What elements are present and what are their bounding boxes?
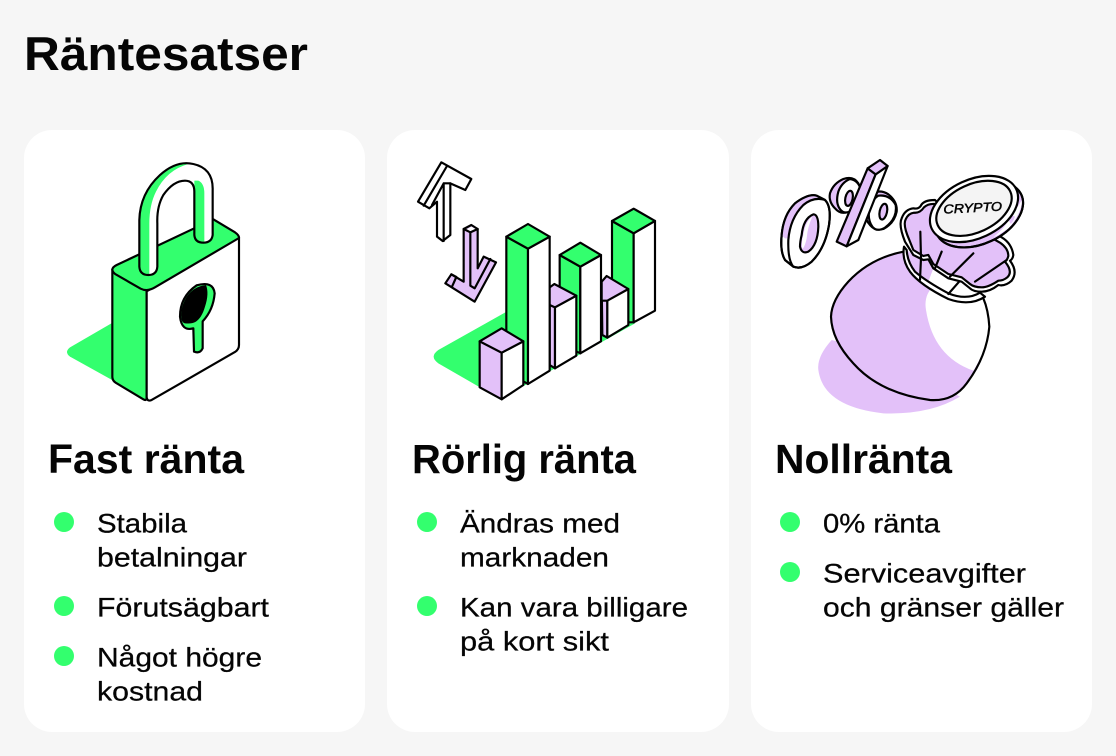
percent symbol [781, 160, 897, 268]
bullet list: rörlig ränta: på kort sikt [460, 626, 610, 656]
bullet list: rörlig ränta: Ändras med [460, 508, 620, 538]
bag lower collar [903, 247, 985, 302]
bullet list: rörlig ränta: Kan vara billigare [460, 592, 688, 622]
bullet list: rörlig ränta: marknaden [460, 542, 609, 572]
bullet list: fast ränta: Stabila [97, 508, 187, 538]
bag body [831, 252, 989, 400]
bullet list: nollränta: 0% ränta [823, 508, 940, 538]
bullet list: nollränta: och gränser gäller [823, 592, 1064, 622]
bar 1 [480, 328, 523, 399]
bullet list: fast ränta: kostnad [97, 676, 203, 706]
heading: nollränta: Nollränta [775, 436, 953, 482]
shackle [139, 163, 213, 275]
percent circle left [830, 178, 861, 213]
percent slash [837, 160, 888, 246]
bar 6 [612, 209, 655, 322]
percent circle right [866, 192, 897, 230]
icon: bar chart with arrows [418, 162, 655, 399]
bullet list: fast ränta: Något högre [97, 642, 262, 672]
coin label: CRYPTO [943, 200, 1003, 217]
heading: fast ränta: Fast ränta [48, 436, 245, 482]
bag ruffle [901, 200, 1015, 292]
heading: rörlig ränta: Rörlig ränta [412, 436, 637, 482]
keyhole [180, 284, 215, 352]
bullet list: rörlig ränta [417, 508, 688, 656]
bullet list: nollränta: Serviceavgifter [823, 558, 1026, 588]
bar 4 [560, 243, 601, 353]
title: Räntesatser [24, 27, 308, 80]
bullet list: fast ränta [54, 508, 270, 706]
bar 2 [506, 224, 550, 384]
bullet list: fast ränta: betalningar [97, 542, 247, 572]
bullet list: nollränta [780, 508, 1064, 622]
arrow down [445, 225, 496, 302]
bullet list: fast ränta: Förutsägbart [97, 592, 270, 622]
icon: padlock [67, 163, 239, 401]
icon: crypto bag with zero percent [781, 160, 1034, 413]
arrow up [418, 162, 471, 241]
panel: nollränta [751, 130, 1092, 732]
coin [919, 163, 1034, 261]
bar 3 [550, 284, 576, 368]
panel: rörlig ränta [387, 130, 729, 732]
panel: fast ränta [24, 130, 365, 732]
digit zero [781, 195, 830, 268]
bar 5 [602, 276, 628, 338]
